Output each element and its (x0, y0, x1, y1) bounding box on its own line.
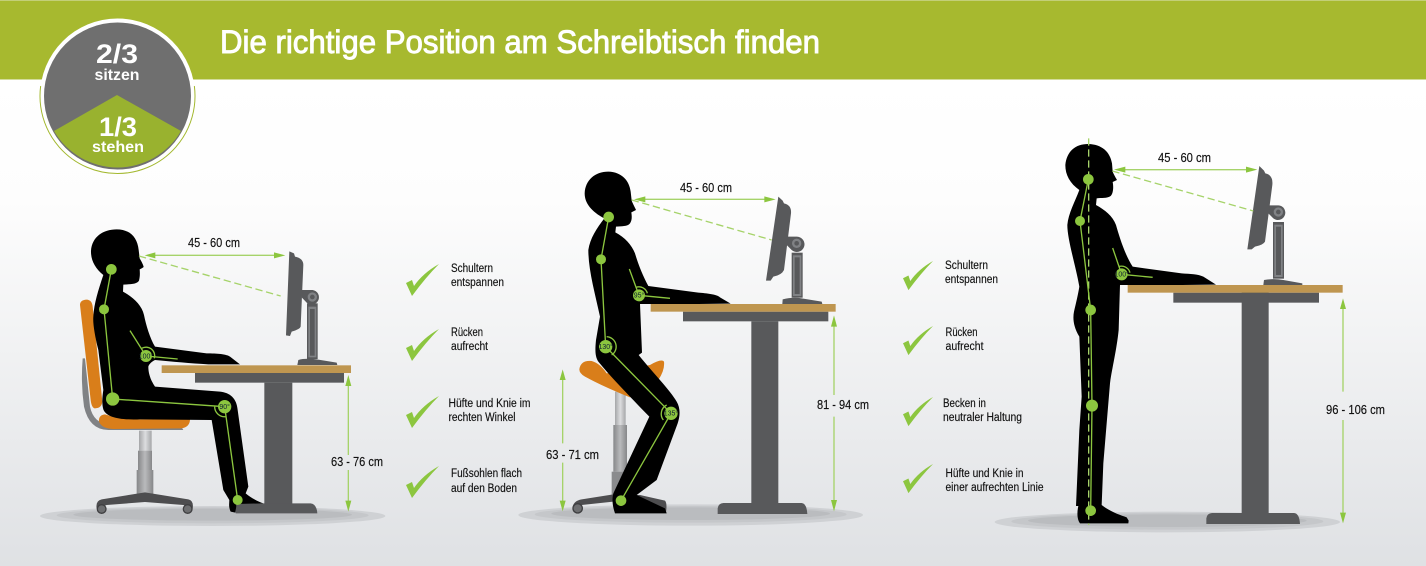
desk height arrow (1340, 298, 1346, 523)
label: viewing distance, perching: 45 - 60 cm (680, 181, 732, 195)
item: hips and knees: Hüfte und Knie im (448, 398, 530, 410)
item: back: Rücken (451, 327, 483, 339)
posture skeleton (99, 264, 243, 505)
label: desk height, standing: 96 - 106 cm (1326, 403, 1385, 417)
badge: 2/3 sitzen, 1/3 stehen: stehen (92, 139, 144, 156)
person silhouette (585, 172, 731, 513)
scene: sitting on office chair (40, 229, 385, 526)
viewing distance arrow (1112, 167, 1257, 211)
item: shoulders: Schultern (945, 260, 988, 272)
saddle stool (573, 361, 666, 513)
checklist: seated (406, 263, 530, 498)
item: pelvis: Becken in (943, 398, 986, 410)
viewing distance arrow (632, 196, 776, 240)
posture skeleton: 135° (664, 410, 678, 418)
monitor (766, 197, 822, 304)
floor shadow (995, 512, 1340, 532)
item: shoulders (903, 260, 998, 290)
stool height arrow (560, 369, 566, 511)
posture skeleton: 130° (598, 343, 613, 351)
item: shoulders (406, 263, 504, 296)
item: back: aufrecht (946, 341, 984, 353)
desk (1128, 285, 1343, 524)
item: hips and knees (406, 396, 530, 428)
badge: 2/3 sitzen, 1/3 stehen: sitzen (94, 67, 140, 84)
floor shadow (518, 504, 863, 526)
item: hips and knees: einer aufrechten Linie (946, 482, 1044, 494)
item: hips and knees: Hüfte und Knie in (946, 468, 1024, 480)
scene: standing (995, 138, 1346, 532)
item: hips and knees (903, 464, 1044, 494)
person silhouette (91, 229, 263, 513)
title: Die richtige Position am Schreibtisch finden (220, 24, 820, 60)
monitor (1247, 166, 1302, 285)
desk height arrow (345, 375, 351, 512)
item: shoulders: entspannen (945, 274, 998, 286)
checklist: standing (903, 260, 1044, 494)
posture skeleton (1075, 138, 1153, 525)
posture skeleton: 100° (139, 352, 153, 360)
item: hips and knees: rechten Winkel (448, 412, 516, 424)
office chair (80, 300, 193, 513)
item: soles: auf den Boden (451, 483, 517, 495)
item: shoulders: Schultern (451, 263, 493, 275)
label: desk height, seated: 63 - 76 cm (331, 455, 383, 469)
posture skeleton: 100° (1114, 271, 1129, 279)
item: back (903, 326, 984, 355)
label: stool height: 63 - 71 cm (546, 448, 599, 462)
label: viewing distance, standing: 45 - 60 cm (1158, 151, 1211, 165)
badge: 2/3 sitzen, 1/3 stehen: 2/3 (96, 39, 138, 69)
item: back: Rücken (946, 327, 978, 339)
item: pelvis (903, 397, 1022, 426)
badge: 2/3 sitzen, 1/3 stehen (40, 18, 195, 174)
item: soles (406, 466, 522, 498)
desk (162, 365, 351, 513)
desk (651, 304, 836, 514)
desk height arrow (831, 315, 837, 511)
viewing distance arrow (139, 252, 285, 296)
floor shadow (40, 506, 385, 526)
item: pelvis: neutraler Haltung (943, 412, 1022, 424)
item: shoulders: entspannen (451, 277, 504, 289)
item: back: aufrecht (451, 341, 489, 353)
item: back (406, 327, 489, 361)
item: soles: Fußsohlen flach (451, 468, 522, 480)
posture skeleton: 95° (634, 292, 644, 300)
header banner (0, 0, 1426, 80)
posture skeleton (596, 212, 678, 506)
scene: perching on saddle stool (518, 172, 863, 526)
monitor (286, 251, 337, 365)
person silhouette (1065, 144, 1216, 523)
badge: 2/3 sitzen, 1/3 stehen: 1/3 (99, 112, 137, 142)
posture skeleton: 90° (219, 403, 230, 411)
label: desk height, perching: 81 - 94 cm (817, 398, 869, 412)
label: viewing distance, seated: 45 - 60 cm (188, 236, 240, 250)
